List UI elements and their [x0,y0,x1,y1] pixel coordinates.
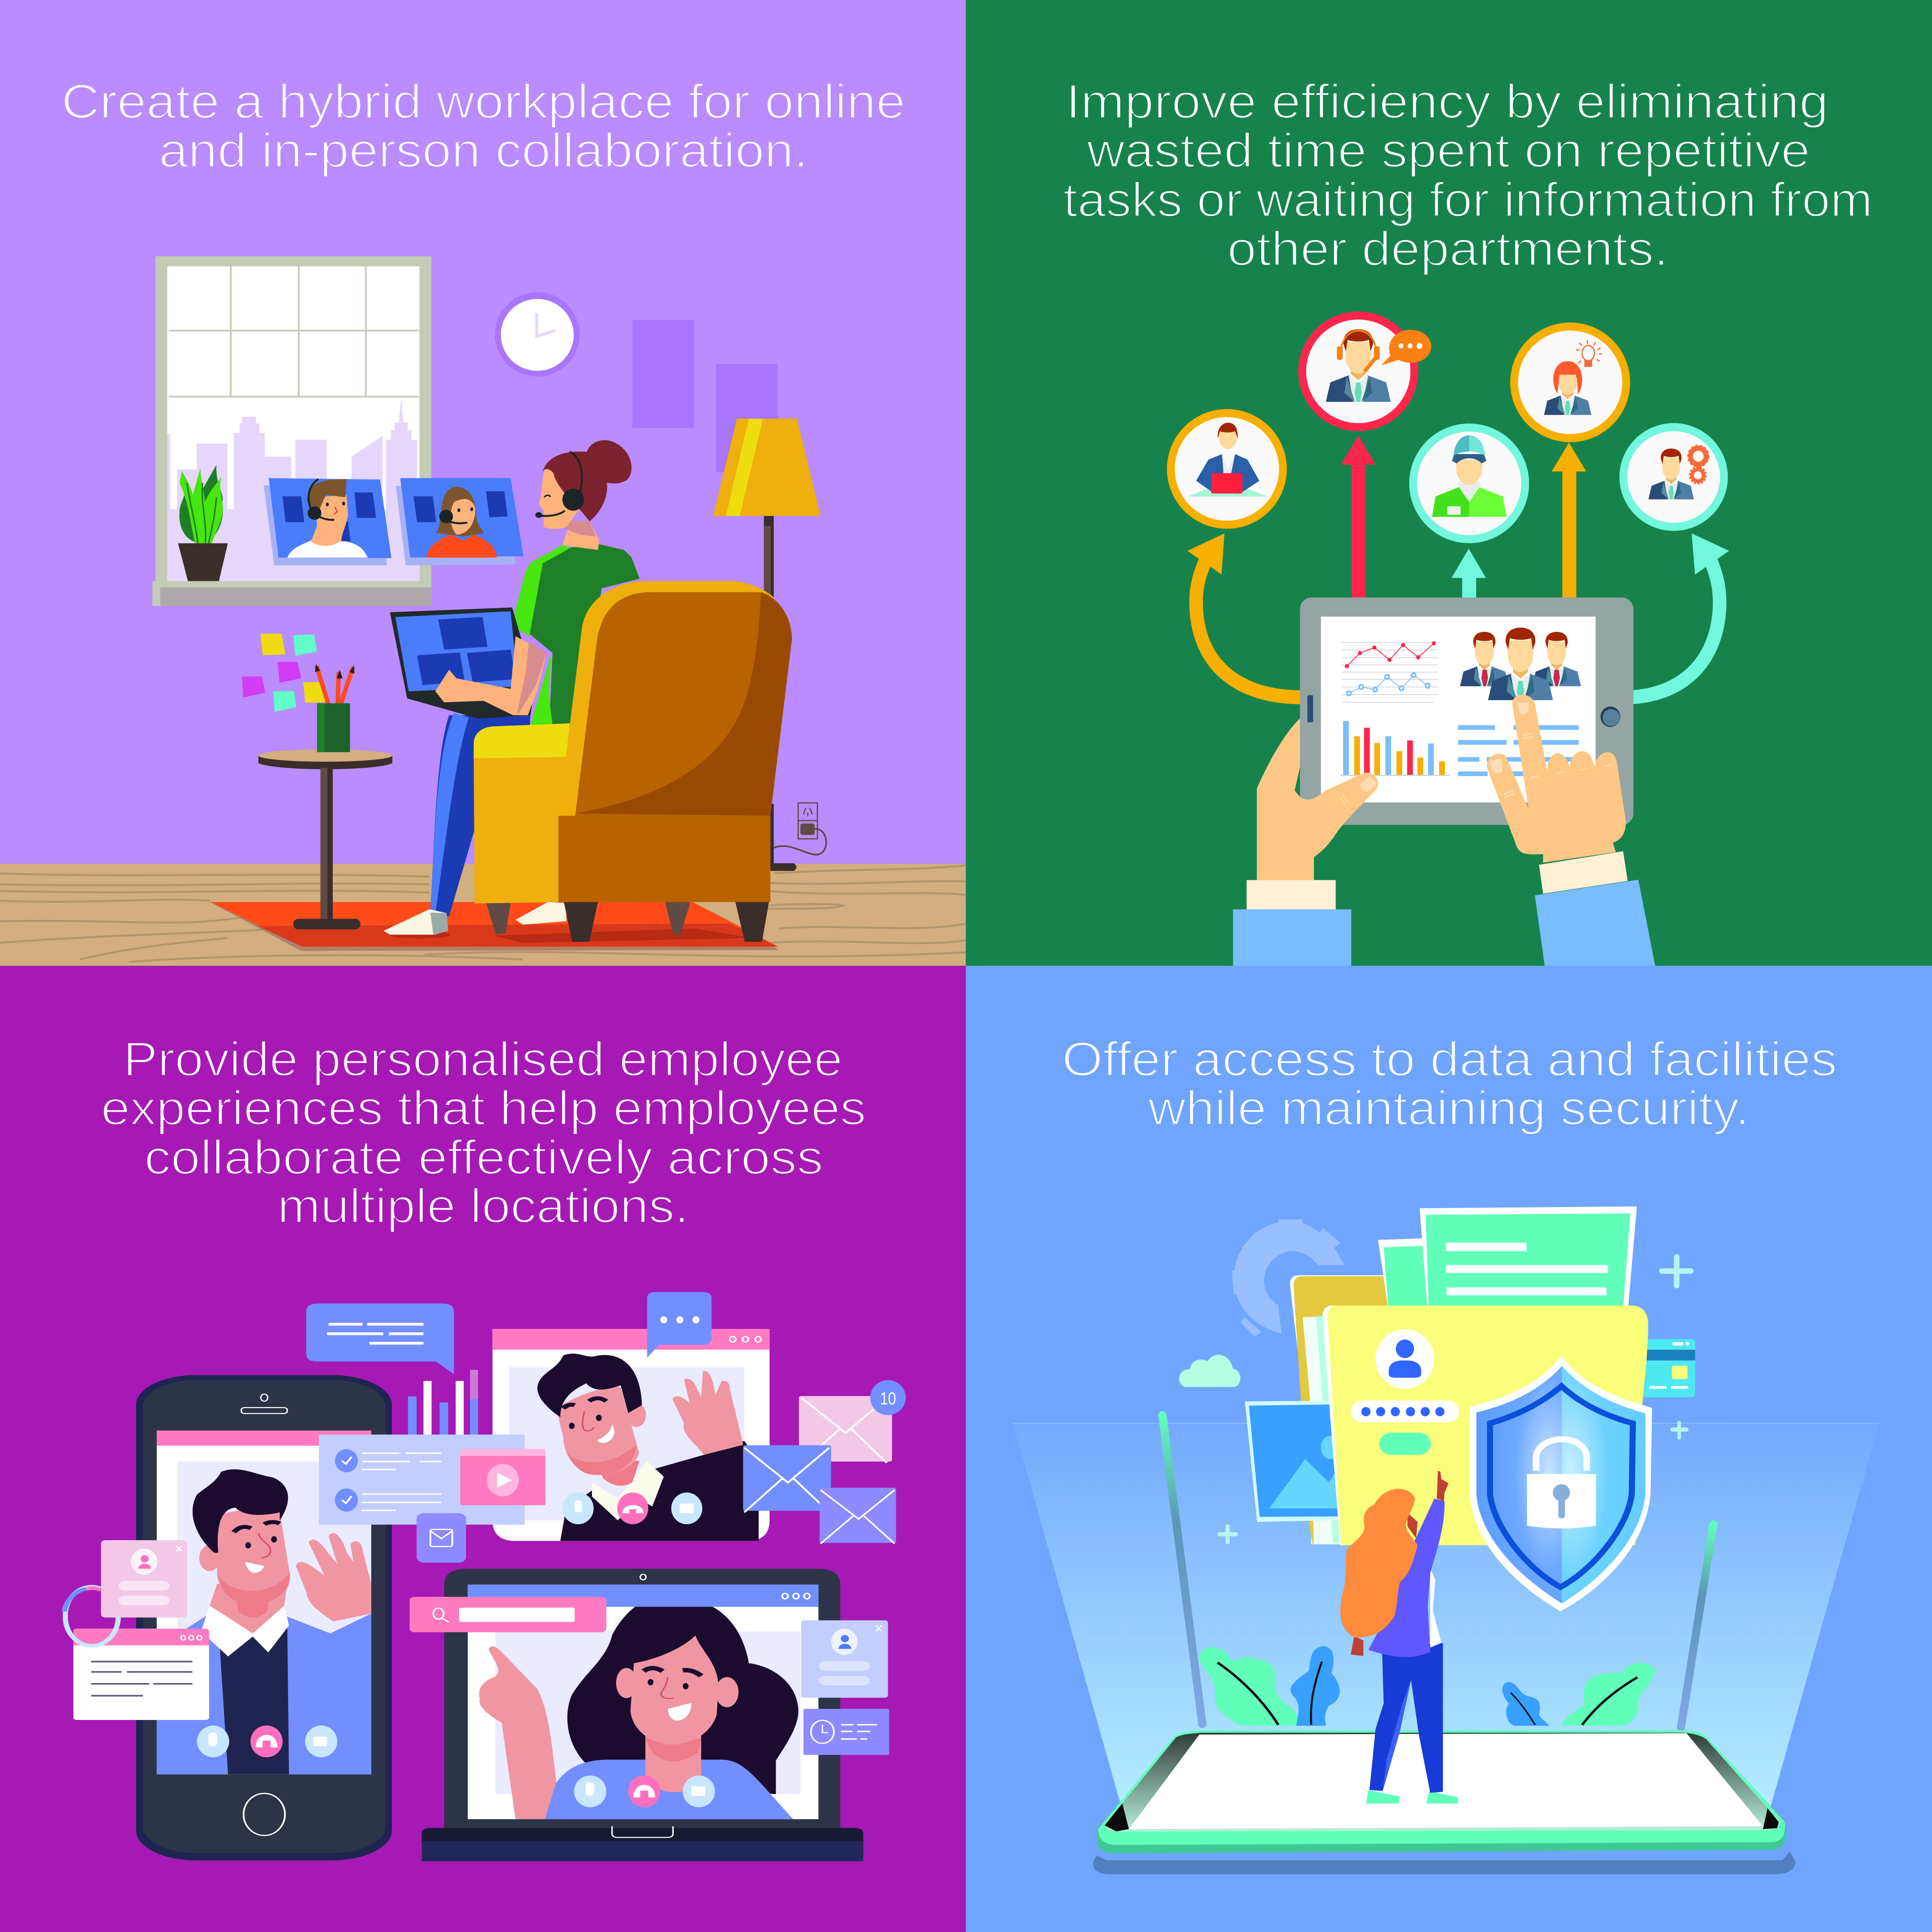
arrow: teal up [1452,549,1486,600]
gear [1232,1219,1344,1337]
man on phone [157,1469,371,1774]
right hand [1487,695,1655,966]
beam edge bars [1162,1415,1714,1728]
role circle: support agent [1298,312,1432,431]
heading: improve efficiency: wasted time spent on repetitive [1086,124,1810,177]
heading: improve efficiency: Improve efficiency by eliminating [1066,75,1829,128]
task card [319,1435,546,1525]
video call tile: man [264,478,391,565]
search bar [409,1597,607,1632]
video window: waving man [492,1329,770,1541]
envelope: violet [819,1488,896,1544]
woman pointing at folder [1340,1471,1458,1804]
curved arrow: teal right [1632,534,1729,697]
wall art [632,320,778,472]
cloud [1179,1355,1240,1387]
woman on laptop [479,1607,798,1819]
sticky notes [242,634,325,712]
envelope: pink with badge: 10 [880,1389,896,1408]
hologram beam [1013,1159,1879,1811]
side table [258,749,392,929]
plus signs [1218,1254,1694,1544]
envelope: blue [743,1445,831,1512]
heading: personalised experiences: multiple locations. [277,1179,689,1233]
document card [73,1629,209,1720]
heading: hybrid workplace: Create a hybrid workplace for online [61,75,905,128]
arm [435,636,546,715]
heading: personalised experiences: experiences that help employees [101,1081,866,1135]
profile card: blue [801,1620,888,1698]
payment card [1613,1339,1695,1397]
heading: improve efficiency: tasks or waiting for information from [1063,173,1873,227]
heading: data access and security: while maintaining security. [1148,1081,1750,1135]
envelope: pink with badge [799,1380,906,1463]
woman [383,440,640,934]
bar chart [1341,721,1450,776]
panel: hybrid workplace [0,0,966,966]
heading: data access and security: Offer access to data and facilities [1062,1032,1837,1086]
role circle: technician [1409,424,1529,543]
panel: personalised experiences [0,966,966,1932]
armchair [474,581,792,942]
heading: personalised experiences: Provide personalised employee [123,1032,843,1086]
security shield [1470,1356,1652,1611]
yellow folder [1322,1306,1648,1545]
phone [136,1375,392,1860]
mail tile [417,1513,466,1563]
heading: improve efficiency [1063,75,1873,276]
clock [495,292,579,376]
chat bubble: text [306,1304,454,1374]
text lines [1458,725,1579,776]
floor lamp [713,419,821,871]
arrow: gold up [1552,443,1586,600]
tablet [1300,597,1633,825]
role circle: engineer gears [1620,423,1728,531]
heading: hybrid workplace [61,75,905,177]
laptop [422,1569,863,1861]
heading: improve efficiency: other departments. [1227,222,1668,276]
left hand [1233,719,1378,966]
line charts [1341,641,1438,702]
heading: hybrid workplace: and in-person collaboration. [159,124,808,177]
heading: data access and security [1062,1032,1837,1135]
illustration: secure folder over phone [1013,1159,1879,1874]
window [152,256,431,606]
documents behind folder [1290,1207,1637,1544]
mini bar chart [408,1370,478,1437]
illustration: woman on video call in armchair [0,256,966,966]
chat bubble: dots [647,1292,712,1358]
schedule card [804,1709,889,1755]
rug [210,902,779,951]
phone platform [1093,1730,1796,1874]
panel: improve efficiency [966,0,1932,966]
head [535,440,631,550]
panel: data access and security [966,966,1932,1932]
shirt [512,544,640,725]
pencil cup [315,664,355,752]
profile card: pink [101,1540,187,1617]
floor [0,864,966,966]
heading: personalised experiences [101,1032,866,1233]
illustration: video collaboration devices [64,1292,906,1861]
progress ring [64,1587,118,1646]
call buttons [197,1726,337,1757]
curved arrow: gold left [1187,534,1301,697]
illustration: tablet distributing to roles [1167,312,1729,966]
role circle: ideas woman [1510,322,1630,442]
heading: personalised experiences: collaborate effectively across [144,1131,823,1184]
team of three [1460,628,1581,700]
role circle: laptop worker [1167,409,1287,529]
picture card [1245,1401,1365,1522]
arrow: red up [1341,435,1376,600]
laptop [390,607,535,719]
call buttons [574,1775,715,1807]
plants [1198,1646,1656,1726]
power outlet [773,803,826,855]
video call tile: woman [396,478,524,565]
plant [178,465,228,581]
